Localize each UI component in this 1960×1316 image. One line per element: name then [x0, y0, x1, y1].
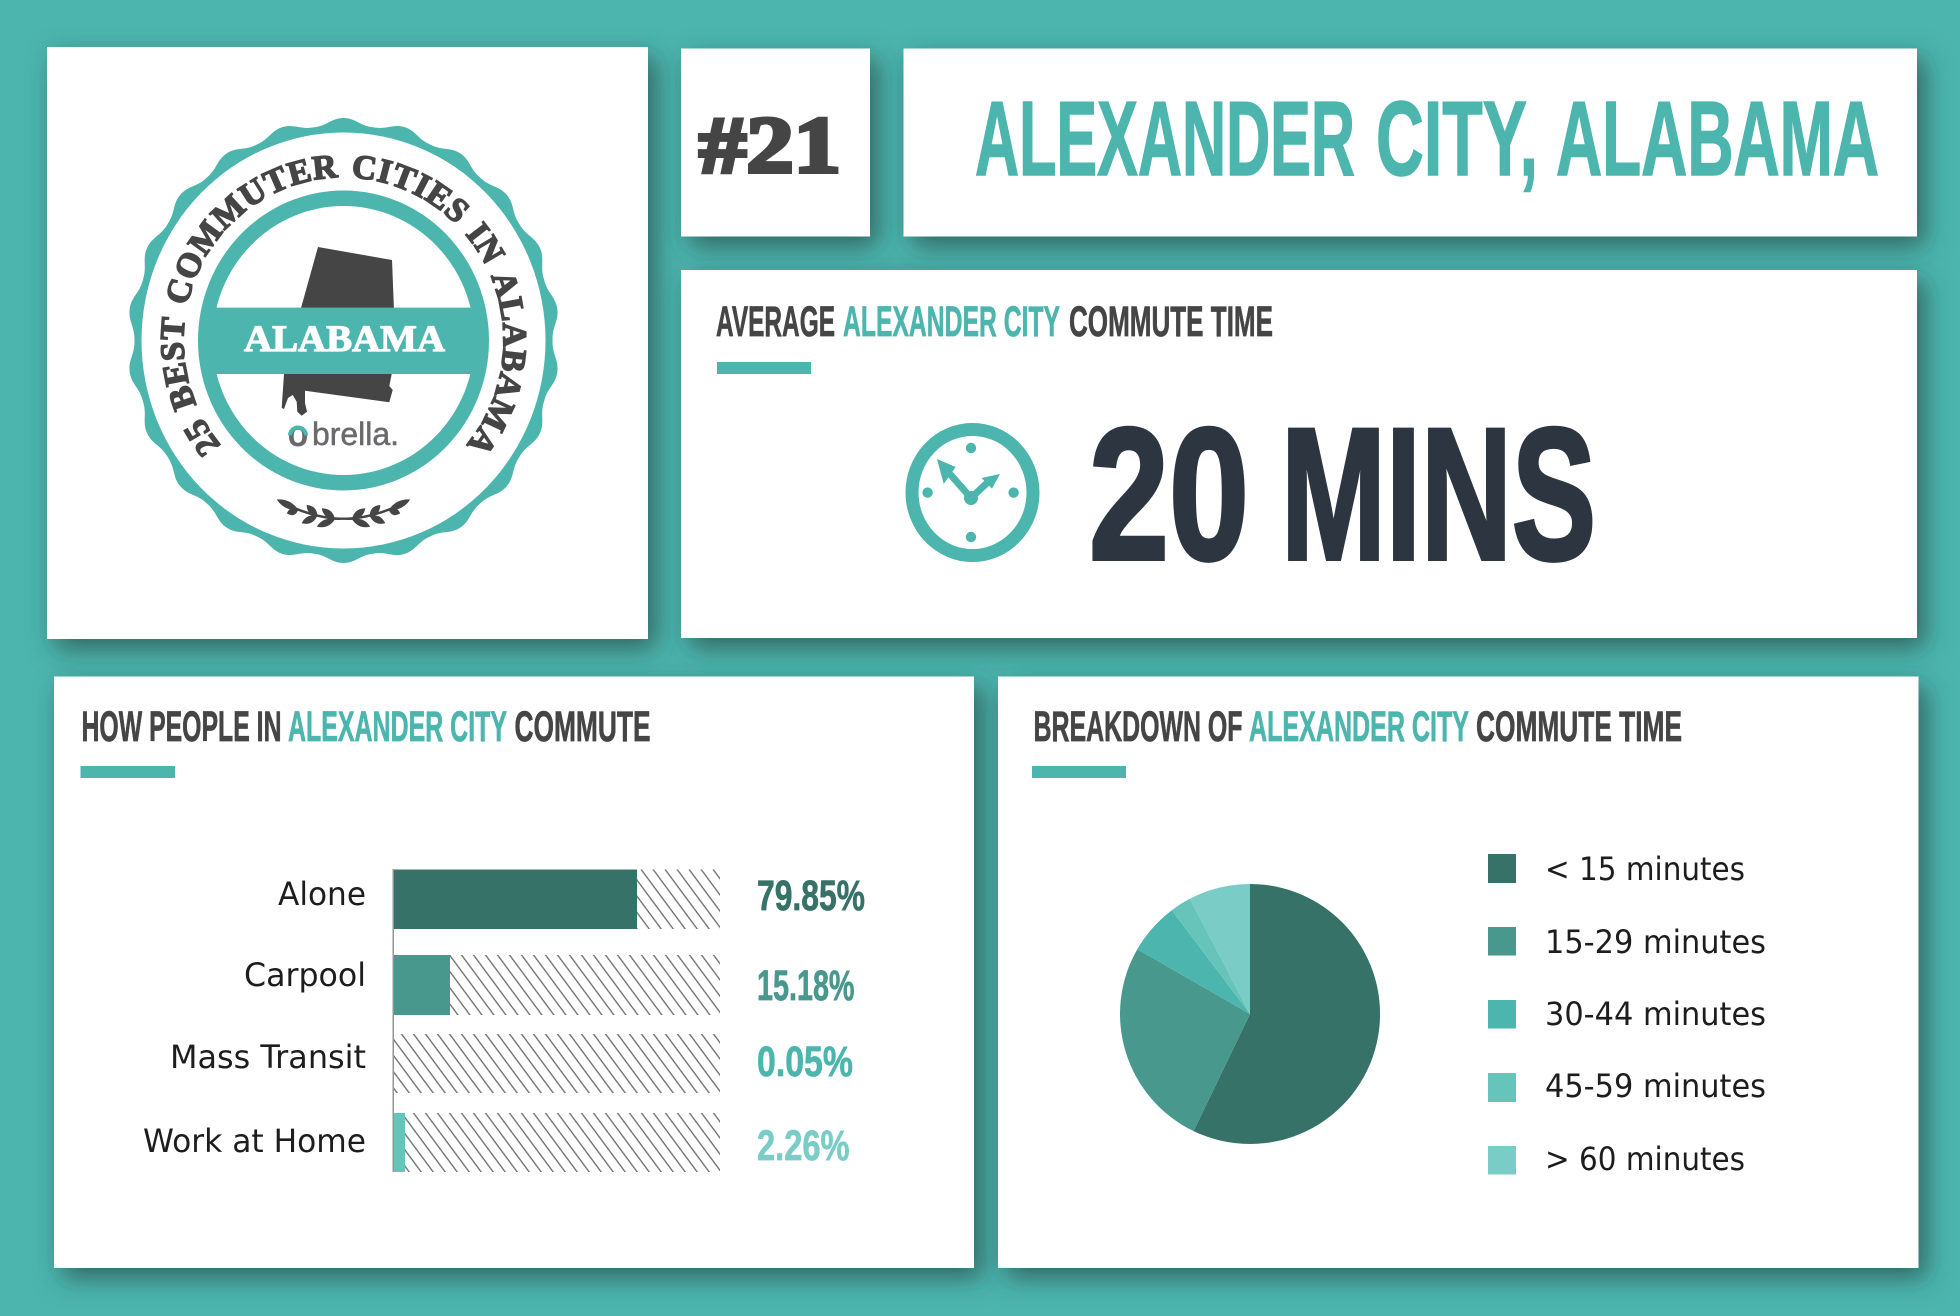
title: CITY,	[1376, 80, 1538, 198]
heading	[82, 703, 650, 751]
heading: AVERAGE	[716, 298, 835, 346]
panel: how people commute	[54, 676, 974, 1268]
heading underline	[717, 362, 811, 374]
heading: ALEXANDER CITY	[843, 298, 1060, 346]
curved badge text: 25 BEST COMMUTER CITIES IN ALABAMA	[160, 155, 527, 458]
panel: badge	[40, 42, 672, 664]
hatched bar tracks	[393, 870, 720, 1172]
panel: commute time breakdown	[998, 676, 1918, 1268]
badge: 25 best commuter cities in Alabama	[129, 118, 558, 563]
bar values	[392, 869, 637, 1172]
legend: 30-44 minutes	[1545, 995, 1766, 1033]
band: Alabama	[206, 308, 481, 374]
heading: ALEXANDER CITY	[1249, 703, 1469, 751]
percentages	[757, 872, 865, 1170]
heading	[1034, 703, 1682, 751]
legend: < 15 minutes	[1545, 850, 1745, 888]
percentages: 79.85%	[757, 872, 865, 920]
heading: COMMUTE TIME	[1069, 298, 1273, 346]
heading: HOW PEOPLE IN	[82, 703, 282, 751]
legend: 15-29 minutes	[1545, 923, 1766, 961]
icon: laurel	[275, 496, 412, 530]
panel: rank	[681, 48, 870, 236]
heading: BREAKDOWN OF	[1034, 703, 1242, 751]
title: ALEXANDER	[975, 80, 1355, 198]
icon: Alabama state silhouette	[282, 247, 394, 416]
heading	[716, 298, 1273, 346]
legend: > 60 minutes	[1545, 1140, 1745, 1178]
big number: 20 mins: 20	[1089, 389, 1249, 599]
percentages: 15.18%	[757, 962, 854, 1010]
panel: average commute time	[681, 270, 1917, 638]
row labels: Carpool	[244, 956, 366, 994]
row labels: Mass Transit	[170, 1038, 366, 1076]
logo: obrella: brella.	[312, 416, 399, 452]
row labels: Alone	[278, 875, 366, 913]
legend: 45-59 minutes	[1545, 1067, 1766, 1105]
pie chart	[1120, 884, 1380, 1144]
row labels: Work at Home	[143, 1122, 366, 1160]
icon: clock	[912, 430, 1033, 556]
big number: 20 mins	[1089, 389, 1596, 599]
percentages: 0.05%	[757, 1038, 853, 1086]
legend	[1488, 850, 1766, 1178]
percentages: 2.26%	[757, 1122, 850, 1170]
row labels	[143, 875, 366, 1160]
rank number: #21	[699, 102, 841, 190]
heading underline	[1032, 766, 1126, 778]
big number: 20 mins: MINS	[1281, 389, 1596, 599]
heading: COMMUTE TIME	[1476, 703, 1682, 751]
logo: obrella: o	[288, 414, 308, 453]
heading underline	[80, 766, 175, 778]
heading: ALEXANDER CITY	[288, 703, 507, 751]
band: Alabama: ALABAMA	[244, 319, 445, 360]
panel: city title	[904, 48, 1917, 236]
bar chart	[143, 869, 865, 1172]
heading: COMMUTE	[514, 703, 650, 751]
